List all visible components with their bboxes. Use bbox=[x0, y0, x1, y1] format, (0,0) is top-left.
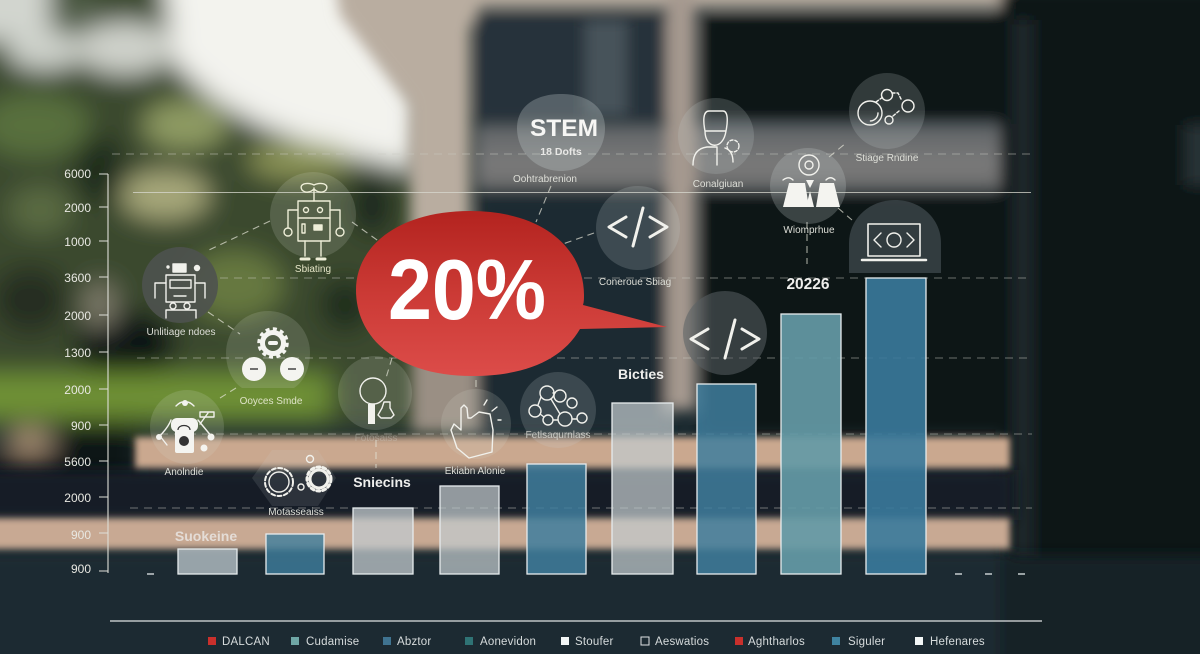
legend: Siguler bbox=[848, 636, 885, 648]
icon: code brackets, Coneroue Sbiag: Coneroue Sbiag bbox=[599, 277, 671, 288]
icon: gears, Motasseaiss bbox=[252, 450, 336, 518]
dashed grid lines bbox=[112, 154, 1032, 508]
y axis with tick labels: 2000 bbox=[64, 309, 91, 323]
y axis with tick labels bbox=[64, 167, 108, 576]
legend: Hefenares bbox=[930, 636, 985, 648]
icon: gears, Ooyces Smde: Ooyces Smde bbox=[240, 396, 303, 407]
icon: STEM badge: STEM bbox=[530, 115, 598, 142]
icon: pointing hand, Ekiabn Alonie: Ekiabn Alonie bbox=[445, 466, 506, 477]
y axis with tick labels: 900 bbox=[71, 562, 91, 576]
y axis with tick labels: 6000 bbox=[64, 167, 91, 181]
icon: robot head, Anolndie bbox=[150, 390, 224, 478]
icon: engineer person, Conalgiuan bbox=[678, 98, 754, 190]
y axis with tick labels: 2000 bbox=[64, 383, 91, 397]
icon: target with blocks, Wiomprhue: Wiomprhue bbox=[783, 225, 835, 236]
chart value labels: Suokeine bbox=[175, 528, 237, 544]
chart value labels bbox=[175, 276, 830, 544]
legend: Cudamise bbox=[306, 636, 359, 648]
dashed connectors bbox=[208, 143, 852, 468]
icon: code brackets, lower bbox=[683, 291, 767, 375]
y axis with tick labels: 2000 bbox=[64, 491, 91, 505]
y axis with tick labels: 1000 bbox=[64, 235, 91, 249]
icon: robot head, Anolndie: Anolndie bbox=[165, 467, 204, 478]
icon: target with blocks, Wiomprhue bbox=[770, 148, 846, 236]
y axis with tick labels: 900 bbox=[71, 419, 91, 433]
icon: robot, Unlitiage ndoes bbox=[142, 247, 218, 338]
icon: STEM badge: Oohtrabrenion bbox=[513, 174, 577, 185]
icon: circles network, Stiage Rndine bbox=[849, 73, 925, 164]
y axis with tick labels: 5600 bbox=[64, 455, 91, 469]
icon: STEM badge: 18 Dofts bbox=[540, 146, 582, 158]
chart value labels: 20226 bbox=[786, 276, 830, 293]
legend: Stoufer bbox=[575, 636, 613, 648]
icon: robot, Sbiating bbox=[270, 172, 356, 275]
icon: gears, Ooyces Smde bbox=[226, 311, 310, 407]
legend bbox=[110, 621, 1042, 648]
legend: Aghtharlos bbox=[748, 636, 805, 648]
legend: Aonevidon bbox=[480, 636, 536, 648]
legend: Aeswatios bbox=[655, 636, 709, 648]
icon: pointing hand, Ekiabn Alonie bbox=[441, 389, 511, 477]
icon: molecule network, Fetlsaqurnlass: Fetlsaqurnlass bbox=[525, 430, 591, 441]
y axis with tick labels: 900 bbox=[71, 528, 91, 542]
red callout with 20%: 20% bbox=[388, 243, 546, 338]
icon: code brackets, Coneroue Sbiag bbox=[596, 186, 680, 288]
y axis with tick labels: 3600 bbox=[64, 271, 91, 285]
icon: gears, Motasseaiss: Motasseaiss bbox=[268, 507, 324, 518]
icon: robot, Unlitiage ndoes: Unlitiage ndoes bbox=[147, 327, 215, 338]
icon: laptop with code bbox=[849, 200, 941, 273]
icon: magnifier and flask: Fotosaiss bbox=[355, 433, 397, 444]
y axis with tick labels: 1300 bbox=[64, 346, 91, 360]
chart value labels: Sniecins bbox=[353, 474, 411, 490]
icon: engineer person, Conalgiuan: Conalgiuan bbox=[693, 179, 743, 190]
icon: STEM badge bbox=[513, 94, 605, 185]
icon: molecule network, Fetlsaqurnlass bbox=[520, 372, 596, 448]
legend: DALCAN bbox=[222, 636, 270, 648]
icon: robot, Sbiating: Sbiating bbox=[295, 264, 331, 275]
y axis with tick labels: 2000 bbox=[64, 201, 91, 215]
legend: Abztor bbox=[397, 636, 431, 648]
red callout with 20% bbox=[356, 211, 667, 376]
icon: circles network, Stiage Rndine: Stiage Rndine bbox=[856, 153, 919, 164]
chart value labels: Bicties bbox=[618, 366, 664, 382]
bar chart bbox=[147, 278, 1025, 574]
icon: magnifier and flask bbox=[338, 356, 412, 444]
